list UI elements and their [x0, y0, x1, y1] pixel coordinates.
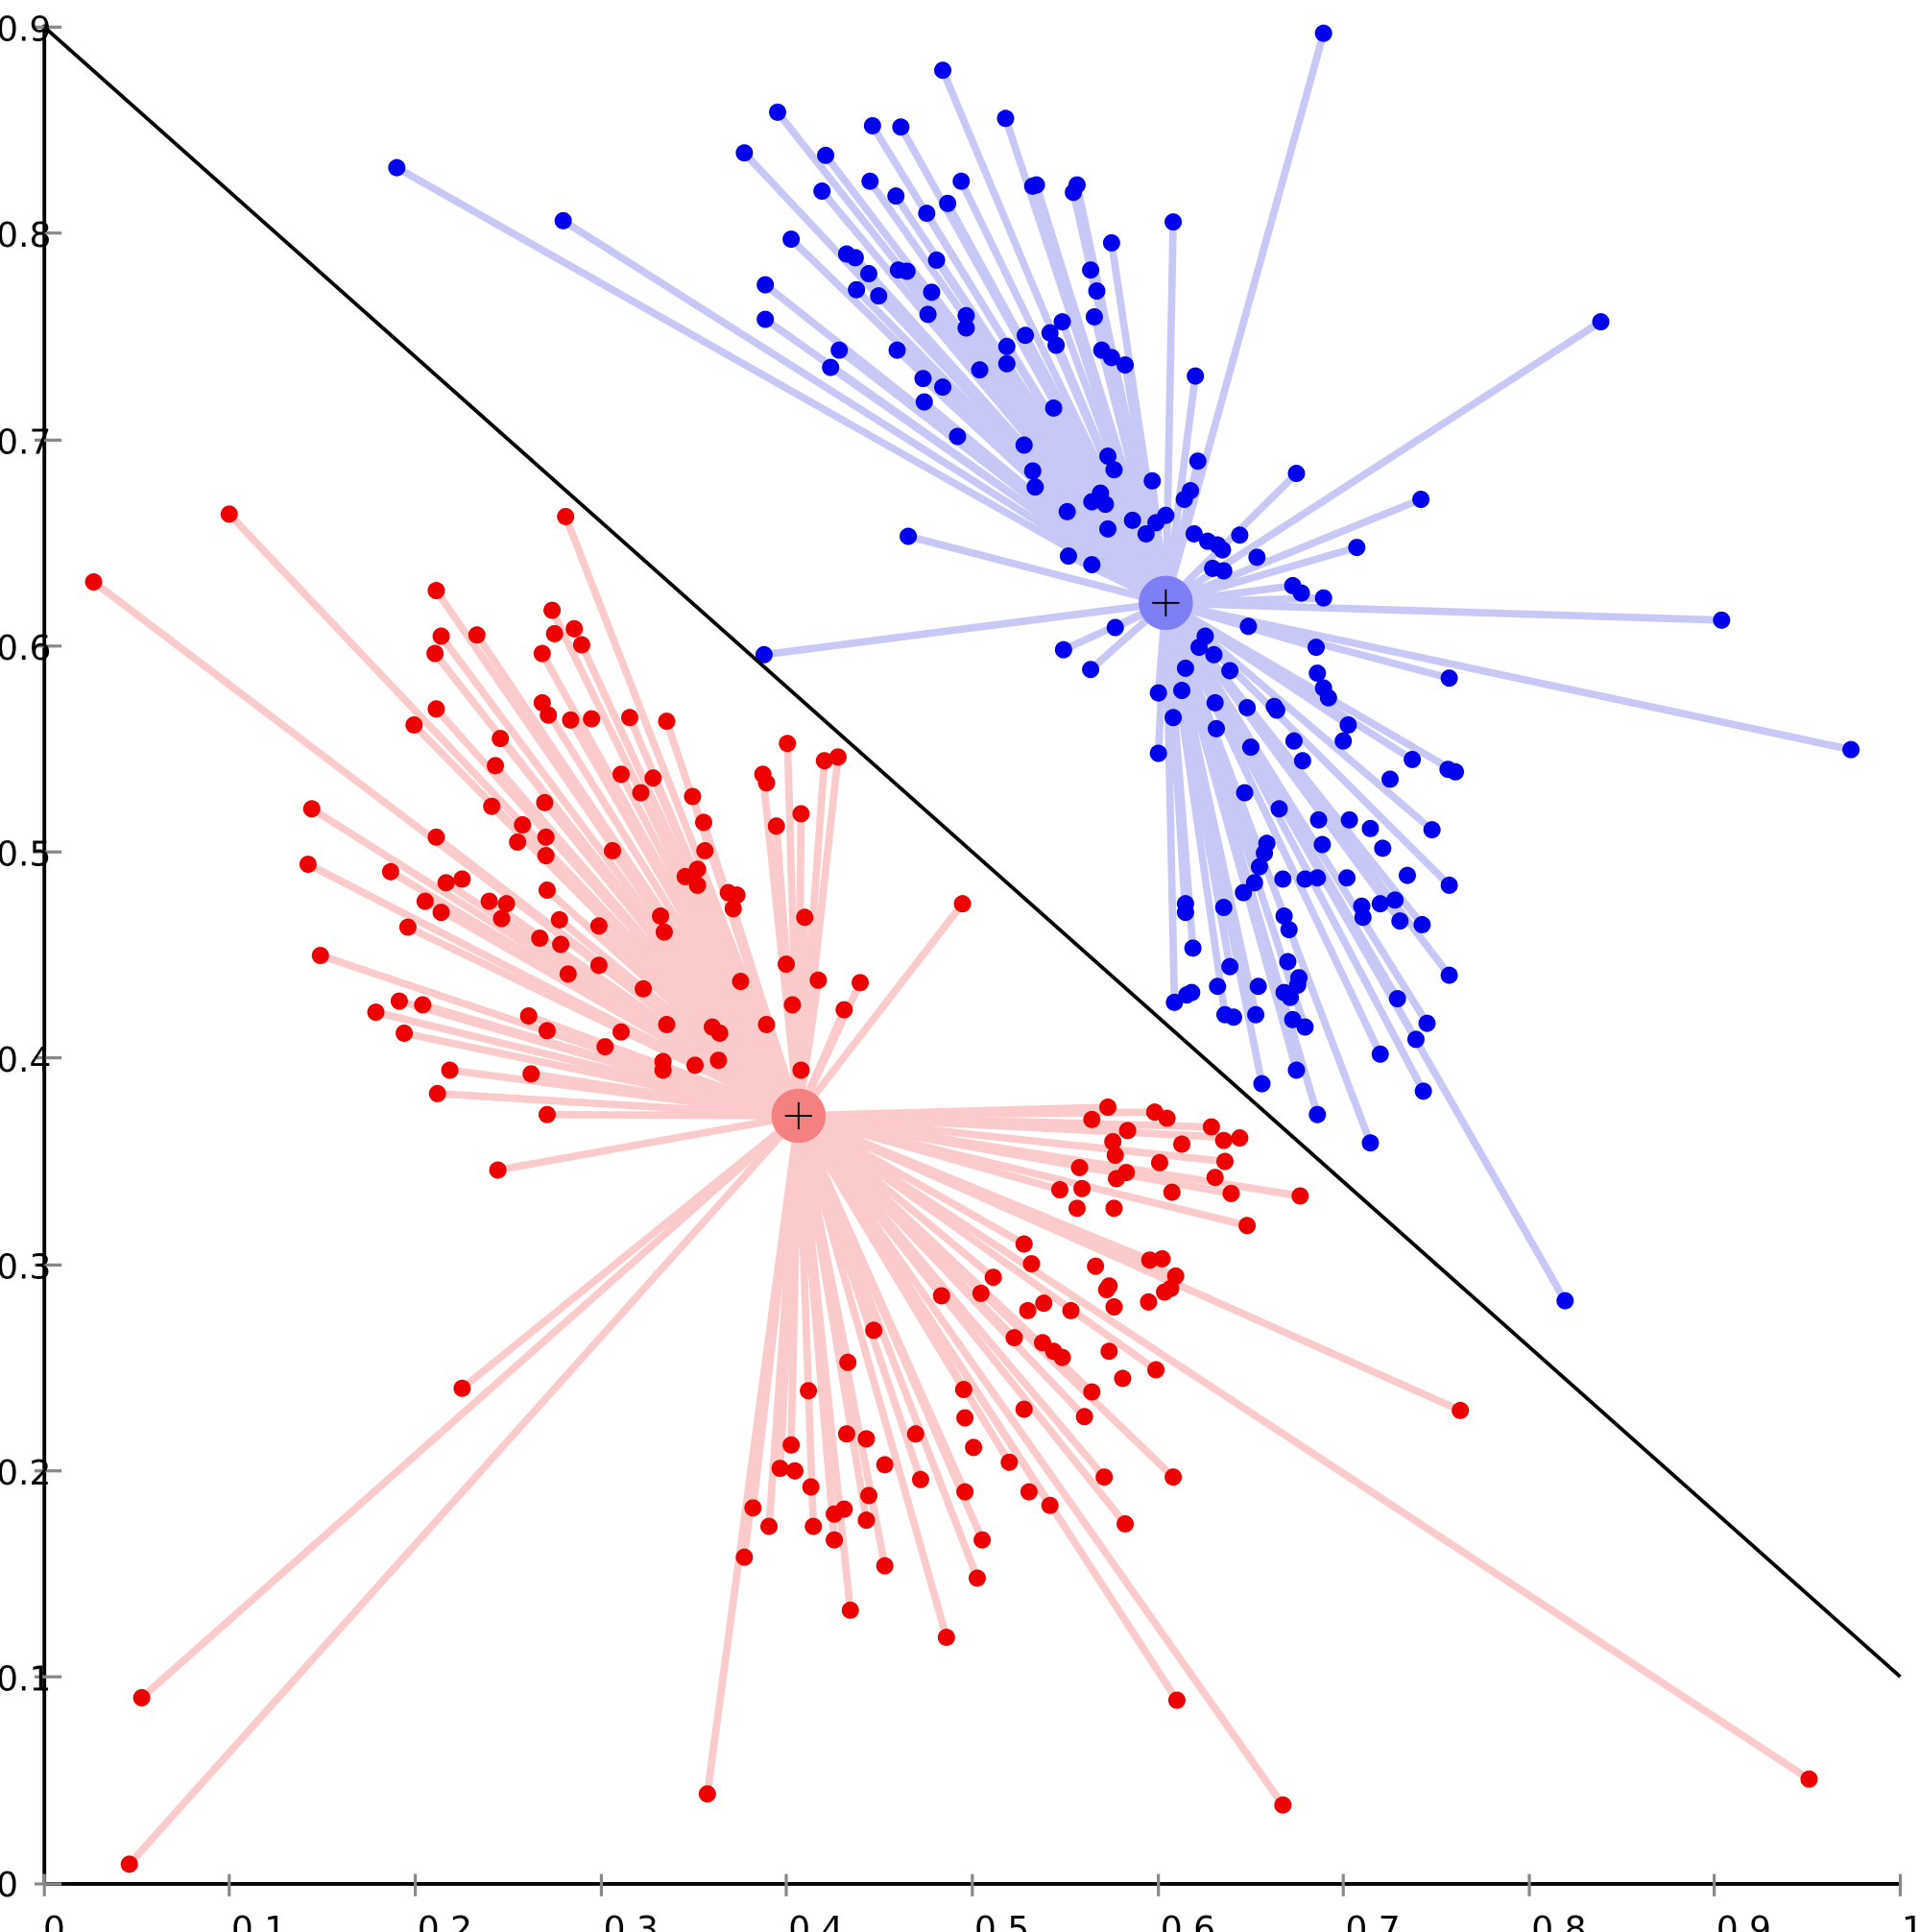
- blue centroid: [1139, 576, 1193, 630]
- red points: [85, 505, 1817, 1872]
- x-axis labels: [43, 1910, 1920, 1932]
- blue points: [388, 25, 1860, 1310]
- blue cluster: [388, 25, 1860, 1310]
- red centroid: [772, 1089, 826, 1143]
- blue connector lines: [396, 34, 1851, 1301]
- y-axis labels: [0, 10, 51, 1905]
- red cluster: [85, 505, 1817, 1872]
- red connector lines: [94, 514, 1809, 1864]
